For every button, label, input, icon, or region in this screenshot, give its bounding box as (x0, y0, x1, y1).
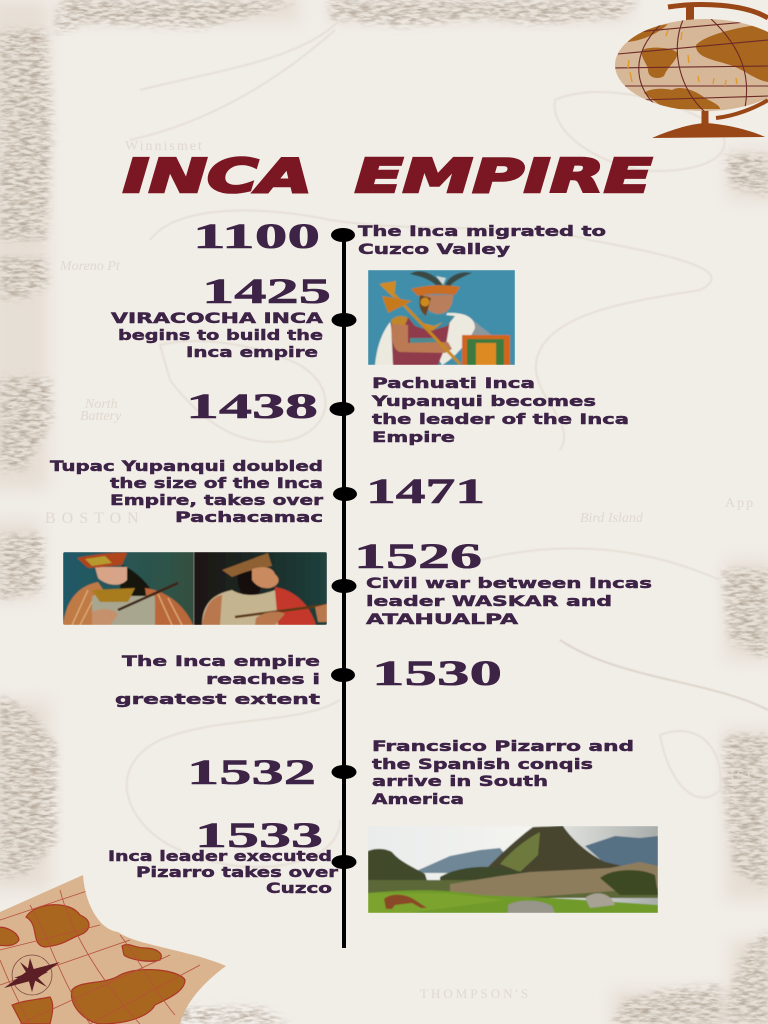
event: 1100: 1100 (193, 216, 320, 256)
icon: globe (612, 5, 768, 138)
event: 1530 (115, 653, 502, 708)
event: 1532 (187, 739, 634, 808)
event: 1471 (50, 459, 485, 526)
paper map background: ISL (730, 769, 757, 784)
event: 1532: the Spanish conqis (372, 757, 593, 773)
paper map background: Moreno Pt (59, 259, 121, 274)
event: 1533: Cuzco (266, 881, 332, 897)
event: 1526: 1526 (354, 536, 482, 576)
event: 1471: Tupac Yupanqui doubled (50, 459, 323, 475)
event: 1530: 1530 (372, 653, 502, 693)
event: 1425: begins to build the (118, 328, 323, 344)
event: 1526: ATAHUALPA (366, 612, 519, 628)
event: 1438: Pachuati Inca (372, 376, 535, 392)
event: 1425: Inca empire (186, 345, 318, 361)
event: 1425: VIRACOCHA INCA (111, 311, 324, 327)
event: 1425: 1425 (202, 271, 331, 311)
event: 1471: 1471 (366, 471, 485, 511)
event: 1530: The Inca empire (122, 654, 320, 670)
event: 1438: the leader of the Inca (372, 412, 629, 428)
paper map background: Battery (80, 409, 122, 424)
title (123, 149, 652, 203)
paper map background: North (84, 397, 118, 412)
event: 1471: the size of the Inca (110, 476, 323, 492)
portrait: Waskar (63, 552, 194, 625)
image: Viracocha Inca portrait (368, 270, 515, 365)
event: 1533: Inca leader executed (108, 849, 332, 865)
event: 1438: 1438 (186, 386, 318, 426)
paper map background: App (725, 496, 755, 511)
event: 1100: Cuzco Valley (358, 242, 511, 258)
image: Machu Picchu landscape (368, 826, 658, 913)
icon: treasure map (0, 875, 226, 1024)
event: 1425 (111, 271, 331, 361)
event: 1532: arrive in South (372, 774, 548, 790)
paper map background: Winnismet (125, 139, 204, 154)
event: 1533: Pizarro takes over (136, 865, 339, 881)
title: INCA (123, 149, 312, 203)
event: 1532: Francsico Pizarro and (372, 739, 634, 755)
event: 1530: greatest extent (115, 692, 320, 708)
image: Waskar and Atahualpa portraits (63, 552, 327, 625)
icon: compass rose (4, 955, 60, 995)
event: 1526 (354, 536, 652, 628)
paper map background: Bird Island (580, 511, 644, 526)
event: 1100: The Inca migrated to (358, 224, 606, 240)
event: 1526: Civil war between Incas (366, 576, 652, 592)
event: 1438: Yupanqui becomes (371, 394, 596, 410)
event: 1471: Pachacamac (175, 510, 323, 526)
event: 1438 (186, 376, 629, 446)
event: 1532: 1532 (187, 752, 316, 792)
event: 1100 (193, 216, 606, 258)
event: 1530: reaches i (206, 672, 320, 688)
event: 1526: leader WASKAR and (366, 594, 612, 610)
event: 1438: Empire (372, 430, 455, 446)
event: 1533: 1533 (195, 815, 323, 855)
event: 1471: Empire, takes over (110, 493, 324, 509)
paper map background: THOMPSON'S (420, 986, 531, 1001)
title: EMPIRE (355, 149, 652, 203)
portrait: Atahualpa (194, 552, 327, 625)
event: 1533 (108, 815, 339, 897)
paper map background: BOSTON (45, 510, 145, 527)
timeline axis with markers (330, 228, 357, 948)
event: 1532: America (372, 792, 464, 808)
